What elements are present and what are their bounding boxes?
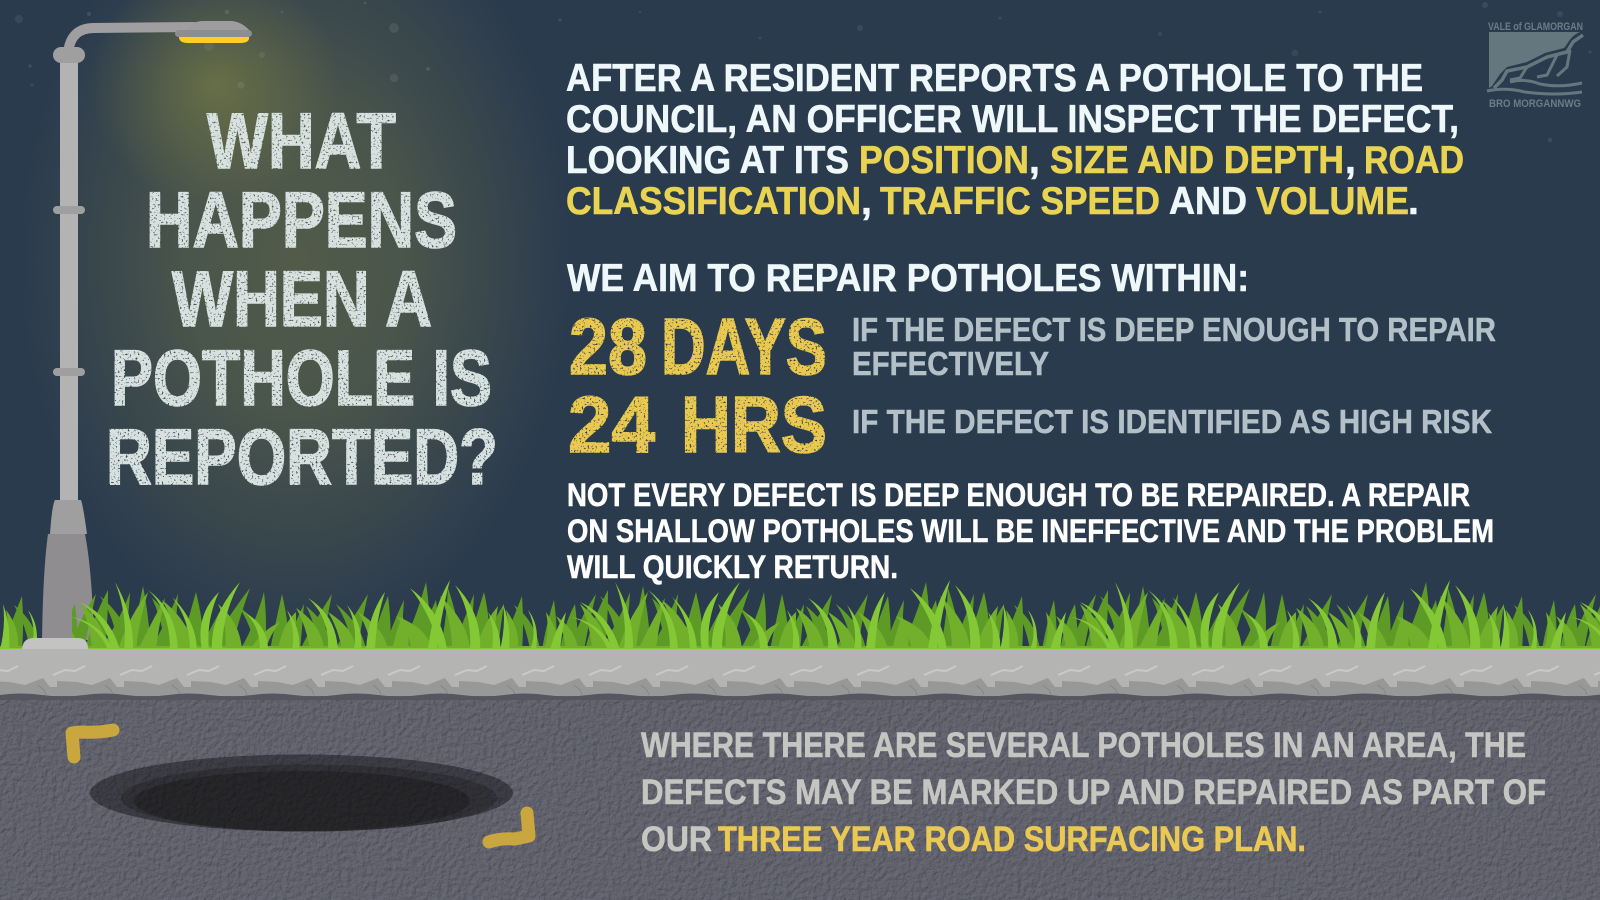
council logo bbox=[1487, 21, 1583, 110]
street lamp post bbox=[42, 21, 252, 640]
repair target: 28 days: DAYS bbox=[661, 302, 827, 391]
repair target: 24 hours: HRS bbox=[681, 380, 827, 469]
repair target: 28 days bbox=[569, 302, 1496, 391]
kerb bbox=[0, 640, 1600, 700]
repair target: 28 days: EFFECTIVELY bbox=[852, 345, 1049, 382]
lamp head underside bbox=[175, 30, 252, 37]
depth note bbox=[567, 477, 1494, 585]
inspection paragraph: VOLUME bbox=[1256, 180, 1409, 223]
road surfacing note bbox=[641, 726, 1546, 859]
inspection paragraph: LOOKING AT ITS bbox=[566, 139, 849, 182]
lamp base lower bbox=[42, 534, 94, 640]
inspection paragraph: , bbox=[861, 180, 872, 223]
inspection paragraph: , bbox=[1345, 139, 1356, 182]
stars bbox=[15, 2, 1592, 144]
title: WHEN A bbox=[172, 255, 432, 343]
title bbox=[106, 97, 498, 501]
inspection paragraph: , bbox=[1029, 139, 1040, 182]
inspection paragraph: ROAD bbox=[1364, 139, 1464, 182]
night sky background bbox=[0, 0, 1600, 660]
repair target: 24 hours: IF THE DEFECT IS IDENTIFIED AS HIGH RISK bbox=[852, 403, 1492, 440]
inspection paragraph bbox=[566, 57, 1464, 223]
repair target: 24 hours bbox=[568, 380, 1492, 469]
road surfacing note: OUR bbox=[641, 820, 712, 859]
repair target: 28 days: IF THE DEFECT IS DEEP ENOUGH TO REPAIR bbox=[852, 311, 1496, 348]
pothole bbox=[90, 754, 513, 832]
inspection paragraph: AFTER A RESIDENT REPORTS A POTHOLE TO THE bbox=[566, 57, 1423, 100]
lamp foot bbox=[22, 638, 88, 649]
inspection paragraph: SIZE AND DEPTH bbox=[1050, 139, 1344, 182]
depth note: WILL QUICKLY RETURN. bbox=[567, 549, 898, 585]
street lamp light glow bbox=[20, 0, 570, 645]
pole clamp lower bbox=[53, 368, 85, 376]
inspection paragraph: CLASSIFICATION bbox=[566, 180, 861, 223]
repair targets heading: WE AIM TO REPAIR POTHOLES WITHIN: bbox=[567, 257, 1249, 300]
lamp collar bbox=[53, 47, 85, 63]
title: WHAT bbox=[207, 97, 396, 185]
inspection paragraph: POSITION bbox=[859, 139, 1029, 182]
inspection paragraph: COUNCIL, AN OFFICER WILL INSPECT THE DEFECT, bbox=[566, 98, 1459, 141]
logo emblem bbox=[1487, 32, 1583, 94]
lamp pole bbox=[60, 60, 78, 502]
pothole marker: top left bbox=[72, 730, 113, 757]
lamp arm bbox=[68, 27, 195, 54]
lamp base upper bbox=[50, 500, 87, 534]
repair target: 28 days: 28 bbox=[569, 302, 647, 391]
lamp head bbox=[188, 21, 250, 31]
grass strip bbox=[0, 580, 1600, 650]
road surface bbox=[0, 694, 1600, 900]
title: REPORTED? bbox=[106, 413, 498, 501]
pothole marker: bottom right bbox=[489, 813, 529, 842]
inspection paragraph: AND bbox=[1169, 180, 1247, 223]
asphalt texture bbox=[0, 696, 1600, 900]
inspection paragraph: TRAFFIC SPEED bbox=[880, 180, 1160, 223]
logo bottom wording: BRO MORGANNWG bbox=[1489, 98, 1581, 110]
pole clamp upper bbox=[53, 206, 85, 214]
title: POTHOLE IS bbox=[111, 334, 492, 422]
road surfacing note: THREE YEAR ROAD SURFACING PLAN. bbox=[718, 820, 1306, 859]
inspection paragraph: . bbox=[1408, 180, 1419, 223]
title: HAPPENS bbox=[146, 176, 457, 264]
depth note: NOT EVERY DEFECT IS DEEP ENOUGH TO BE REPAIRED. A REPAIR bbox=[567, 477, 1470, 513]
lamp bulb bbox=[179, 37, 249, 43]
repair target: 24 hours: 24 bbox=[568, 380, 655, 469]
